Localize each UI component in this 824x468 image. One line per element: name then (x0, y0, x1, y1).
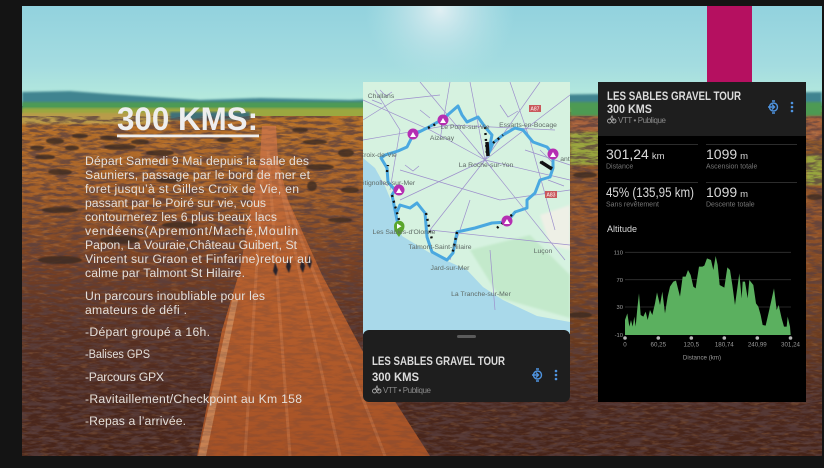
town labels: Essarts-en-Bocage (499, 122, 557, 129)
stats grid: Distance (606, 164, 633, 170)
description paragraph: Papon, La Vouraie,Château Guibert, St (85, 238, 298, 252)
town labels: Talmont-Saint-Hilaire (408, 244, 472, 251)
stats grid: 1099 m (706, 146, 748, 162)
elevation chart: 180,74 (715, 342, 734, 348)
stats grid: Sans revêtement (606, 202, 659, 208)
ground grain texture (22, 116, 822, 456)
stats grid: Descente totale (706, 202, 755, 208)
route line (381, 106, 553, 260)
map bottom sheet: 300 KMS (372, 372, 419, 384)
info list: -Parcours GPX (85, 370, 164, 384)
elevation chart: 301,24 (781, 342, 801, 348)
description paragraph: vendéens(Apremont/Maché,Moulin (85, 224, 298, 238)
town labels: Le Poiré-sur-Vie (440, 124, 490, 131)
elevation chart: 0 (623, 342, 627, 348)
icon: send to device (532, 369, 542, 381)
town labels: Croix-de-Vie (359, 152, 397, 159)
panel: route map (359, 82, 570, 402)
town labels: ant (560, 156, 570, 163)
panel header: 300 KMS (607, 104, 652, 116)
dirt road (190, 120, 440, 460)
info list: -Balises GPS (85, 347, 150, 361)
cyclists on the road (273, 254, 312, 276)
secondary paragraph: amateurs de défi . (85, 303, 187, 317)
elevation chart: 60,25 (651, 342, 667, 348)
description paragraph: foret jusqu’à st Gilles Croix de Vie, en (85, 182, 299, 196)
town labels: Aizenay (430, 135, 455, 142)
info list: -Repas a l’arrivée. (85, 414, 186, 428)
panel header: VTT • Publique (618, 116, 667, 125)
elevation chart: 240,99 (748, 342, 767, 348)
map pins (394, 114, 558, 237)
elevation chart (614, 250, 801, 362)
description paragraph (85, 154, 311, 280)
description paragraph: contournerez les 6 plus beaux lacs (85, 210, 277, 224)
map base (359, 82, 570, 334)
panel: route statistics (598, 82, 806, 402)
stats grid (606, 144, 797, 208)
description paragraph: calme par Talmont St Hilaire. (85, 266, 245, 280)
town labels: La Tranche-sur-Mer (451, 291, 512, 298)
secondary paragraph: Un parcours inoubliable pour les (85, 289, 265, 303)
panel header (598, 82, 806, 136)
stats grid: 45% (135,95 km) (606, 184, 694, 200)
icon: bike (372, 386, 381, 393)
elevation chart: 70 (617, 278, 623, 284)
stats grid: 301,24 km (606, 146, 665, 162)
town labels: étignolles-sur-Mer (361, 180, 416, 187)
info list (85, 325, 302, 428)
elevation chart: 30 (617, 305, 623, 311)
altitude heading: Altitude (607, 224, 637, 234)
elevation chart: 110 (614, 250, 623, 256)
info list: -Départ groupé a 16h. (85, 325, 210, 339)
title: 300 KMS: (117, 101, 258, 137)
town labels (359, 93, 570, 298)
elevation chart: Distance (km) (683, 354, 721, 362)
town labels: Luçon (534, 248, 552, 255)
town labels: Les Sables-d'Olonne (373, 229, 436, 236)
elevation chart: -10 (615, 333, 623, 339)
elevation chart: 120,5 (684, 342, 700, 348)
scrub bushes (30, 128, 823, 318)
town labels: Jard-sur-Mer (431, 265, 470, 272)
road network (363, 82, 570, 310)
secondary paragraph (85, 289, 265, 317)
town labels: A87 (531, 106, 540, 112)
description paragraph: Sauniers, passage par le bord de mer et (85, 168, 311, 182)
description paragraph: Départ Samedi 9 Mai depuis la salle des (85, 154, 309, 168)
stats grid: 1099 m (706, 184, 748, 200)
info list: -Ravitaillement/Checkpoint au Km 158 (85, 392, 302, 406)
stats grid: Ascension totale (706, 164, 757, 170)
map bottom sheet (363, 330, 570, 402)
town labels: Challans (368, 93, 395, 100)
pink accent bar (707, 6, 752, 82)
description paragraph: Vincent sur Graon et Finfarine)retour au (85, 252, 311, 266)
panel header: LES SABLES GRAVEL TOUR (607, 91, 742, 103)
description paragraph: passant par le Poiré sur vie, vous (85, 196, 266, 210)
town labels: La Roche-sur-Yon (459, 162, 513, 169)
map bottom sheet: LES SABLES GRAVEL TOUR (372, 356, 506, 368)
icon: more menu (555, 370, 557, 380)
town labels: A83 (547, 192, 556, 198)
map bottom sheet: VTT • Publique (383, 386, 432, 395)
